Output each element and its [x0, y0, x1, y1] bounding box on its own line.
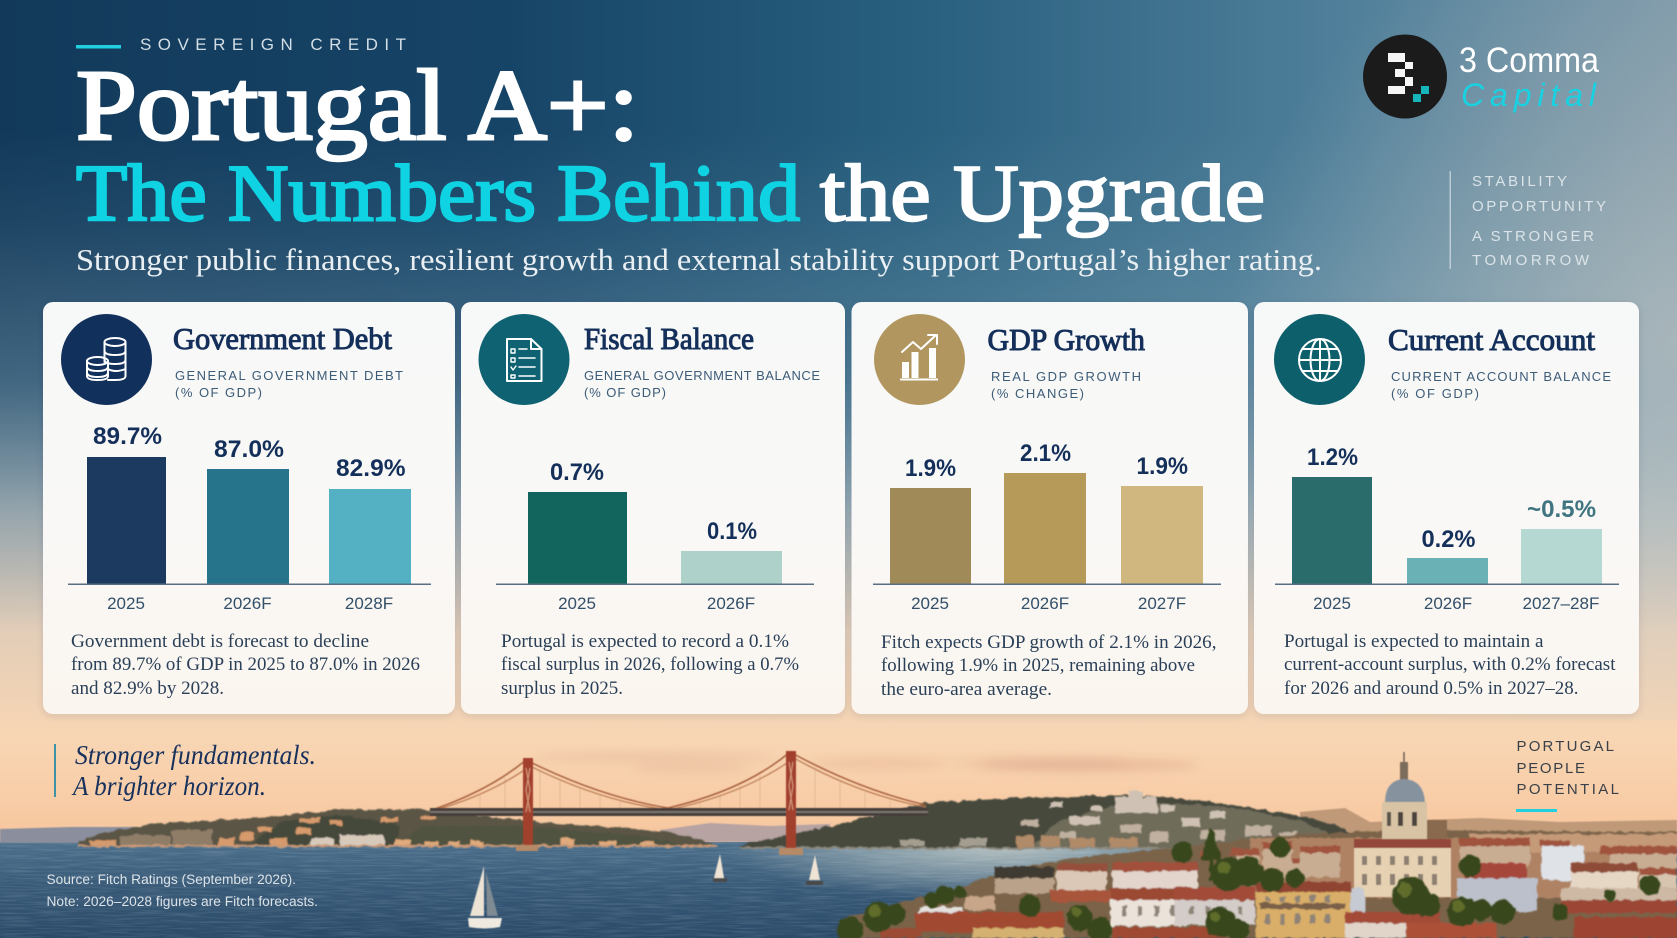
- bar chart: debt: 2028F: [345, 594, 393, 613]
- main title: [76, 49, 1265, 238]
- heading: Fiscal Balance: [584, 322, 754, 356]
- heading: GDP Growth: [988, 323, 1145, 357]
- bar chart: current account: 1.2%: [1307, 444, 1358, 471]
- bar chart: fiscal balance: 2026F: [707, 594, 755, 613]
- bar chart: GDP growth: 2027F: [1138, 594, 1186, 613]
- side tagline: TOMORROW: [1472, 252, 1592, 269]
- bar chart: debt: 2025: [107, 594, 145, 613]
- main title: Portugal A+:: [76, 49, 639, 161]
- tagline callout: [54, 740, 316, 801]
- metric subtitle: REAL GDP GROWTH: [991, 369, 1142, 384]
- panel: current account: [1254, 302, 1639, 714]
- bar chart: debt: 82.9%: [336, 455, 406, 482]
- panel: fiscal balance: [461, 302, 845, 714]
- metric subtitle: [175, 368, 404, 400]
- metric subtitle: [1391, 369, 1612, 401]
- side tagline: [1450, 171, 1609, 269]
- brand tagline: POTENTIAL: [1516, 781, 1623, 798]
- bar chart: GDP growth: 1.9%: [905, 455, 956, 482]
- bar chart: current account: 2027–28F: [1522, 594, 1600, 613]
- heading: Current Account: [1388, 323, 1596, 357]
- left hill: [78, 809, 718, 847]
- panel: government debt: [43, 302, 455, 714]
- eyebrow label: SOVEREIGN CREDIT: [140, 35, 412, 54]
- description: current-account surplus, with 0.2% forecast: [1284, 654, 1616, 675]
- tagline callout: A brighter horizon.: [71, 771, 266, 801]
- bar chart: current account: [1275, 444, 1619, 613]
- bar chart: GDP growth: [873, 440, 1221, 613]
- bridge: [430, 751, 928, 855]
- bar chart: fiscal balance: 0.7%: [550, 459, 604, 486]
- description: Fitch expects GDP growth of 2.1% in 2026,: [881, 632, 1216, 653]
- bar chart: GDP growth: 2025: [911, 594, 949, 613]
- city buildings: [880, 862, 1677, 938]
- icon: coin stacks: [61, 314, 152, 405]
- source note: [46, 872, 318, 909]
- bar chart: debt: 87.0%: [214, 436, 284, 463]
- bar chart: current account: 2025: [1313, 594, 1351, 613]
- main title: the Upgrade: [820, 148, 1265, 238]
- bar chart: GDP growth: 2026F: [1021, 594, 1069, 613]
- main title: The Numbers Behind: [76, 148, 800, 238]
- description: Government debt is forecast to decline: [71, 631, 369, 652]
- description: following 1.9% in 2025, remaining above: [881, 655, 1195, 676]
- description: Portugal is expected to maintain a: [1284, 631, 1544, 652]
- description: fiscal surplus in 2026, following a 0.7%: [501, 654, 799, 675]
- metric subtitle: [991, 369, 1142, 401]
- icon: rising bar chart: [874, 314, 965, 405]
- bar chart: current account: 2026F: [1424, 594, 1472, 613]
- distant hills: [0, 808, 1677, 850]
- city foreground: [840, 830, 1677, 938]
- icon: globe: [1274, 314, 1365, 405]
- metric subtitle: (% OF GDP): [584, 385, 667, 400]
- description: [501, 631, 799, 699]
- icon: document checklist: [478, 314, 570, 405]
- description: and 82.9% by 2028.: [71, 678, 224, 699]
- description: from 89.7% of GDP in 2025 to 87.0% in 2026: [71, 654, 420, 675]
- description: Portugal is expected to record a 0.1%: [501, 631, 789, 652]
- bar chart: debt: 89.7%: [93, 423, 162, 450]
- bar chart: GDP growth: 1.9%: [1136, 453, 1188, 480]
- description: for 2026 and around 0.5% in 2027–28.: [1284, 678, 1578, 699]
- panel: GDP growth: [852, 302, 1248, 714]
- bar chart: debt: 2026F: [223, 594, 272, 613]
- brand tagline: PORTUGAL: [1516, 738, 1618, 755]
- description: the euro-area average.: [881, 679, 1052, 700]
- description: [881, 632, 1216, 700]
- source note: Note: 2026–2028 figures are Fitch forecasts.: [46, 894, 318, 909]
- metric subtitle: [584, 368, 821, 400]
- description: [71, 631, 420, 699]
- side tagline: A STRONGER: [1472, 228, 1597, 245]
- bar chart: fiscal balance: 2025: [558, 594, 596, 613]
- description: [1284, 631, 1616, 699]
- metric subtitle: (% CHANGE): [991, 386, 1085, 401]
- bar chart: fiscal balance: [496, 459, 814, 613]
- metric subtitle: (% OF GDP): [175, 385, 263, 400]
- logo: 3 Comma Capital: Capital: [1461, 77, 1597, 113]
- trees: [837, 826, 1660, 938]
- subtitle: Stronger public finances, resilient growth and external stability support Portugal’s higher rating.: [76, 242, 1322, 277]
- sailboats: [468, 854, 823, 928]
- bar chart: GDP growth: 2.1%: [1020, 440, 1071, 467]
- heading: Government Debt: [173, 322, 393, 356]
- brand tagline: PEOPLE: [1516, 760, 1589, 777]
- side tagline: STABILITY: [1472, 173, 1570, 190]
- bar chart: fiscal balance: 0.1%: [707, 518, 757, 545]
- brand tagline: [1516, 738, 1623, 812]
- side tagline: OPPORTUNITY: [1472, 198, 1609, 215]
- bar chart: current account: 0.2%: [1422, 526, 1476, 553]
- source note: Source: Fitch Ratings (September 2026).: [46, 872, 296, 887]
- tagline callout: Stronger fundamentals.: [75, 740, 316, 770]
- metric subtitle: GENERAL GOVERNMENT DEBT: [175, 368, 404, 383]
- domed church: [1354, 752, 1451, 897]
- water: [0, 842, 1677, 938]
- description: surplus in 2025.: [501, 678, 623, 699]
- logo: 3 Comma Capital: [1363, 34, 1599, 118]
- right hill: [739, 791, 1380, 849]
- logo: 3 Comma Capital: 3 Comma: [1459, 41, 1599, 80]
- bar chart: debt: [68, 423, 431, 613]
- metric subtitle: CURRENT ACCOUNT BALANCE: [1391, 369, 1612, 384]
- metric subtitle: GENERAL GOVERNMENT BALANCE: [584, 368, 821, 383]
- Lisbon landscape photo scene: [0, 751, 1677, 938]
- bar chart: current account: ~0.5%: [1527, 496, 1596, 523]
- metric subtitle: (% OF GDP): [1391, 386, 1480, 401]
